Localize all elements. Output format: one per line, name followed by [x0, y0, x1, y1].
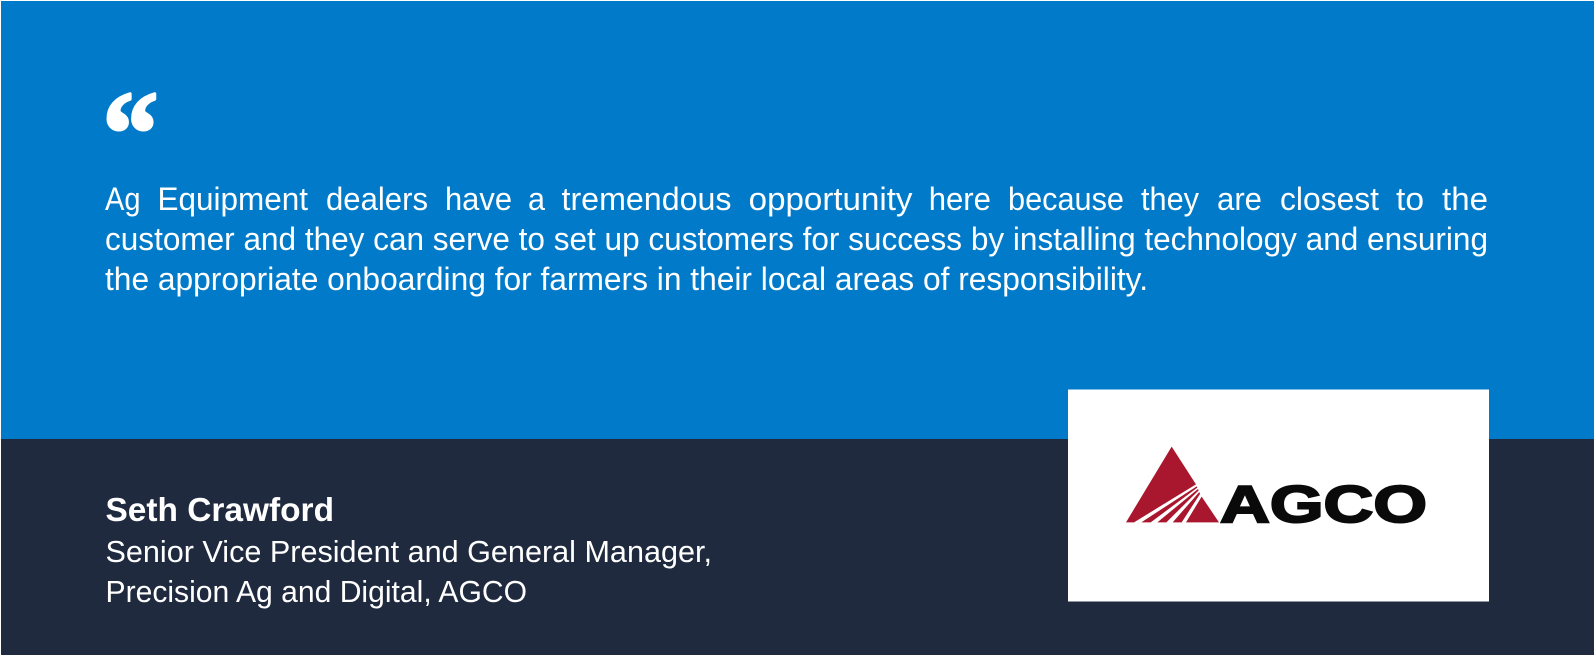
job title line 2: Precision Ag and Digital, AGCO: [106, 574, 527, 609]
name: Seth Crawford: [106, 491, 334, 528]
panel: dark attribution background: [1, 439, 1594, 655]
quote line 1: have: [445, 181, 512, 217]
text block: attribution: [106, 491, 712, 609]
logo wordmark: AGCO: [1220, 476, 1427, 534]
quote line 1: are: [1217, 181, 1262, 217]
quote line 1: they: [1141, 181, 1199, 217]
quote line 1: opportunity: [749, 181, 912, 217]
quote line 1: dealers: [326, 181, 428, 217]
text block: quote: [105, 181, 1488, 297]
quote line 1: a: [528, 181, 545, 217]
quote line 1: Ag: [105, 181, 140, 217]
icon: AGCO triangle mark: [1126, 447, 1219, 522]
quote line 3: the appropriate onboarding for farmers in their local areas of responsibility.: [105, 261, 1148, 297]
panel: blue quote background: [1, 1, 1594, 439]
quote line 1: here: [929, 181, 991, 217]
quote line 1: the: [1442, 181, 1488, 217]
icon: opening quotation mark: “: [102, 66, 158, 200]
quote line 1: Equipment: [158, 181, 308, 217]
quote line 2: customer and they can serve to set up customers for success by installing technology and ensuring: [105, 221, 1488, 257]
quote line 1: closest: [1280, 181, 1379, 217]
quote line 1: because: [1008, 181, 1124, 217]
quote line 1: to: [1396, 181, 1424, 217]
panel: logo card: [1068, 389, 1489, 602]
quote line 1: [105, 181, 1488, 217]
quote line 1: tremendous: [562, 181, 732, 217]
job title line 1: Senior Vice President and General Manager,: [106, 534, 712, 569]
